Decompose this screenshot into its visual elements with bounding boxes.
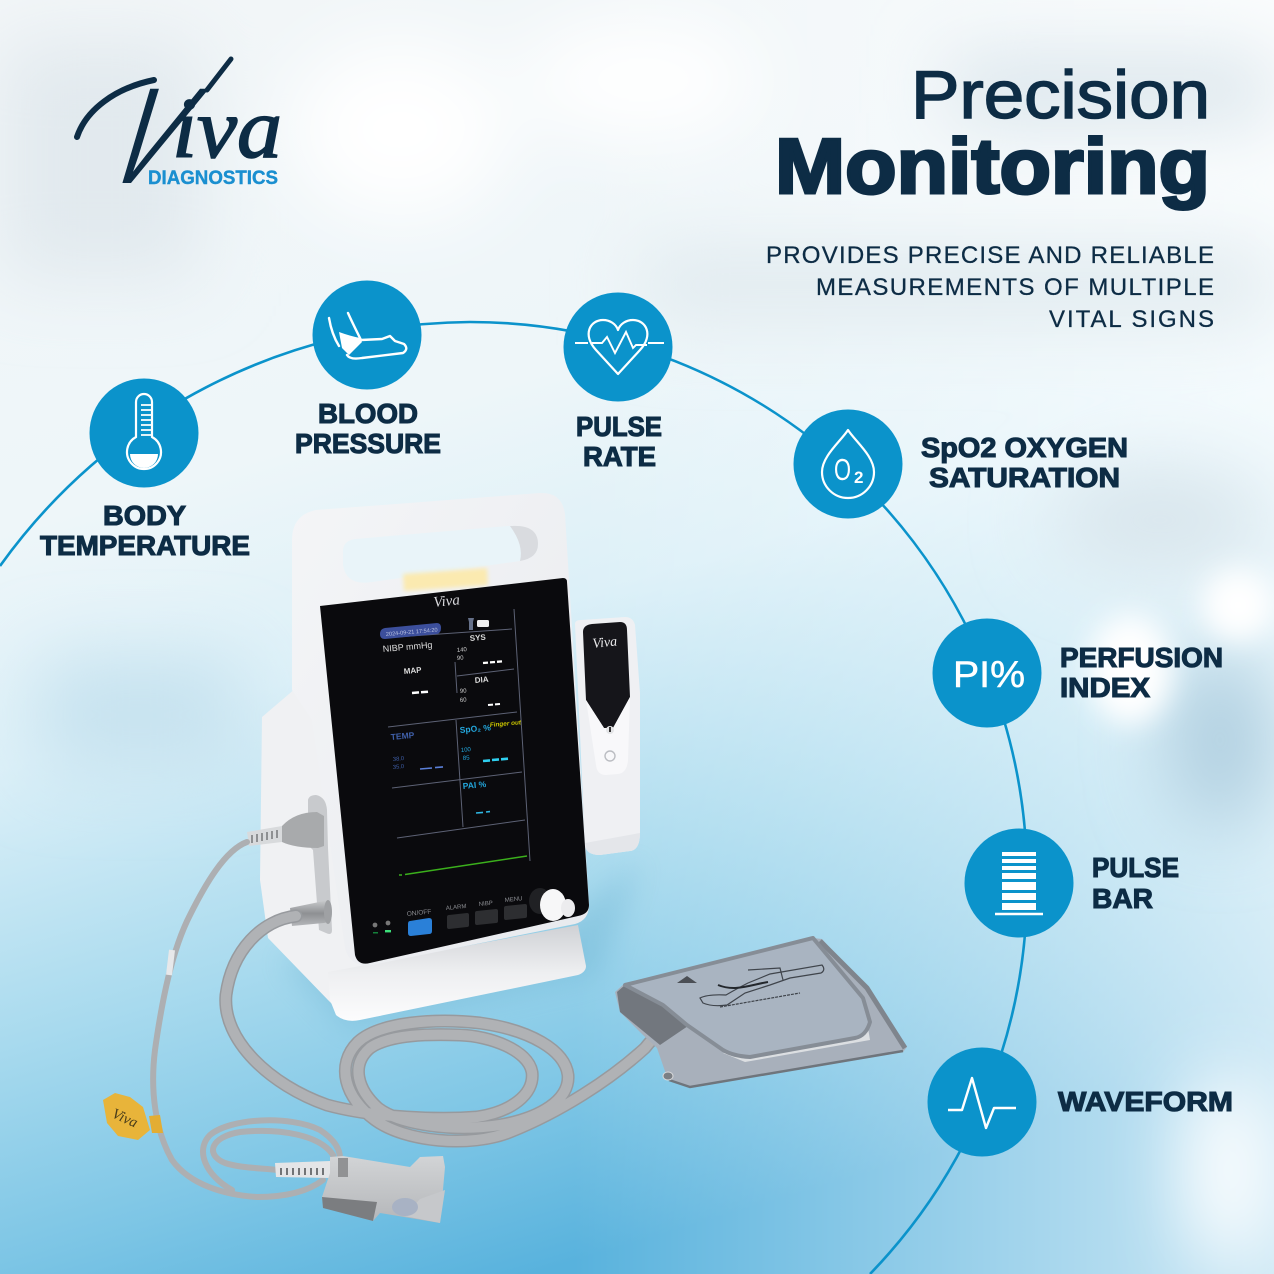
- cable tag: Viva: [109, 1106, 140, 1131]
- cuff dark edge: [820, 941, 905, 1048]
- label: PULSE: [1092, 852, 1179, 883]
- display contents: [380, 592, 530, 875]
- feature: pulse rate: [564, 292, 672, 472]
- side probe holder: Viva: [592, 634, 618, 652]
- front controls: ON/OFF: [406, 908, 432, 918]
- thin sensor cable: [153, 842, 340, 1197]
- display contents: 90: [460, 688, 467, 695]
- display contents: 90: [457, 655, 464, 662]
- icon: oxygen drop: O: [834, 452, 851, 487]
- cuff body: [615, 938, 907, 1088]
- icon: PI percent: PI%: [953, 654, 1025, 695]
- label: WAVEFORM: [1058, 1086, 1233, 1117]
- logo subtitle: DIAGNOSTICS: [148, 168, 278, 189]
- side wall: [260, 688, 372, 1017]
- feature: waveform: [928, 1048, 1233, 1156]
- finger sensor: [275, 1156, 445, 1223]
- label: SATURATION: [929, 462, 1120, 493]
- front controls: [373, 888, 575, 936]
- label: [921, 432, 1128, 493]
- spo2 connector: [247, 812, 324, 848]
- display contents: 35.0: [393, 764, 404, 771]
- feature: perfusion index: [932, 618, 1223, 728]
- date pill: [380, 623, 441, 639]
- feature: body temperature: [40, 378, 250, 561]
- label: [1060, 642, 1223, 703]
- logo V letter with swash: V: [80, 60, 226, 213]
- logo: [77, 59, 282, 213]
- display contents: TEMP: [390, 730, 415, 742]
- title line one: Precision: [911, 57, 1210, 133]
- display contents: 85: [463, 755, 470, 762]
- front controls: NIBP: [479, 901, 493, 908]
- display contents: SpO₂ %: [459, 722, 492, 735]
- display contents: SYS: [469, 633, 487, 643]
- icon: PI percent: [932, 618, 1042, 728]
- display contents: Finger out: [490, 719, 522, 729]
- display contents: 60: [460, 697, 467, 704]
- handle opening: [343, 526, 538, 583]
- label: [576, 411, 662, 472]
- front housing with handle: [292, 493, 589, 965]
- label: RATE: [583, 441, 656, 472]
- front controls: ALARM: [446, 904, 467, 912]
- screen panel: [320, 578, 589, 964]
- arc connecting the vital signs: [0, 322, 1027, 1274]
- description text: PROVIDES PRECISE AND RELIABLE: [766, 242, 1214, 269]
- display contents: 100: [461, 747, 472, 754]
- logo wordmark: iva: [172, 80, 282, 176]
- display contents: PAI %: [462, 779, 487, 791]
- label: BLOOD: [318, 398, 418, 429]
- cuff lining: [723, 1028, 870, 1062]
- display contents: 38.0: [393, 756, 404, 763]
- display contents: MAP: [403, 665, 423, 676]
- icon: heart with pulse: [564, 292, 672, 402]
- cuff flap: [625, 938, 870, 1057]
- base: [328, 925, 586, 1021]
- description text: VITAL SIGNS: [1049, 306, 1214, 333]
- feature: SpO2: [794, 410, 1128, 518]
- feature: pulse bar: [964, 828, 1179, 938]
- display contents: DIA: [474, 675, 489, 685]
- thick cuff tube: [226, 916, 682, 1141]
- cuff inner fold: [617, 985, 688, 1045]
- label: [40, 500, 250, 561]
- blood pressure cuff: [615, 938, 907, 1088]
- icon: thermometer: [90, 378, 198, 488]
- metal ring: [663, 1072, 673, 1080]
- icon: arm with cuff: [312, 280, 422, 390]
- label: [1092, 852, 1179, 914]
- icon: waveform: [928, 1048, 1036, 1156]
- cable tag: [103, 1093, 163, 1140]
- description text: [766, 242, 1214, 333]
- side probe holder: [575, 617, 640, 855]
- label: SpO2 OXYGEN: [921, 432, 1128, 463]
- front controls: MENU: [505, 896, 523, 904]
- label: PULSE: [576, 411, 662, 442]
- label: TEMPERATURE: [40, 530, 250, 561]
- display contents: 2024-09-21 17:54:20: [386, 627, 438, 638]
- arrow mark: [677, 976, 697, 983]
- title line two: Monitoring: [775, 122, 1210, 210]
- display contents: NIBP mmHg: [382, 640, 433, 654]
- icon: stacked bar: [964, 828, 1074, 938]
- label: [295, 398, 441, 459]
- display contents: 140: [457, 647, 468, 654]
- label: PRESSURE: [295, 428, 441, 459]
- indicator light: [403, 568, 488, 591]
- icon: oxygen drop: 2: [854, 468, 863, 487]
- nibp connector: [290, 900, 332, 926]
- feature: blood pressure: [295, 280, 441, 459]
- cables: [153, 842, 682, 1197]
- knob: [529, 888, 551, 914]
- monitor device: [247, 493, 640, 1030]
- label: PERFUSION: [1060, 642, 1223, 673]
- icon: oxygen drop: [794, 410, 902, 518]
- cable sleeve: [169, 950, 172, 975]
- title: [775, 57, 1210, 210]
- connector strip: [308, 795, 332, 934]
- printed diagram: [700, 965, 824, 1007]
- label: INDEX: [1060, 672, 1150, 703]
- soft shadow: [280, 860, 640, 1030]
- label: BAR: [1092, 883, 1153, 914]
- label: BODY: [103, 500, 186, 531]
- description text: MEASUREMENTS OF MULTIPLE: [816, 274, 1214, 301]
- display contents: Viva: [433, 592, 461, 611]
